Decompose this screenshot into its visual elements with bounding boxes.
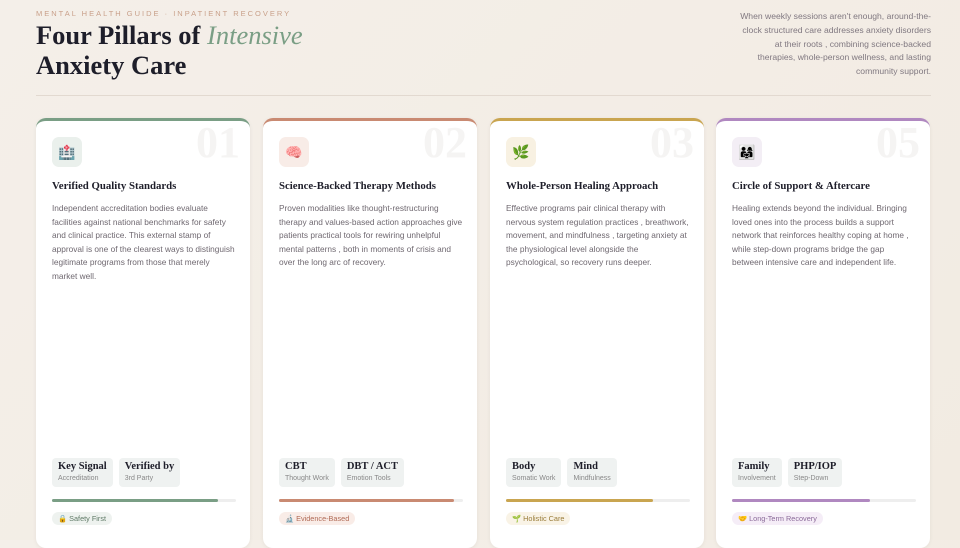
body text: between intensive care and independent life. [732,257,896,267]
panel: whole-person healing [490,118,704,548]
stats: Accreditation [58,475,98,482]
body text: patients practical tools for rewiring unhelpful [279,230,440,240]
body text: while step-down programs bridge the gap [732,244,884,254]
panel: quality standards: 01 [196,118,240,167]
body text: over the long arc of recovery. [279,257,386,267]
stats: Family [738,461,770,472]
body text: legitimate programs from those that merely [52,257,210,267]
body text: Effective programs pair clinical therapy with [506,203,665,213]
body text: psychological, so recovery runs deeper. [506,257,652,267]
stats: 3rd Party [125,475,153,482]
stats [732,458,842,487]
badge [506,512,570,525]
stats: Key Signal [58,461,107,472]
panel: therapy methods: 02 [423,118,467,167]
body text: approval is one of the clearest ways to distinguish [52,244,235,254]
body text: movement, and mindfulness , targeting anxiety at [506,230,687,240]
badge [279,512,355,525]
heading: Verified Quality Standards [52,180,176,192]
body text: and clinical practice. This external stamp of [52,230,210,240]
icon: hospital [52,137,82,167]
body text [506,203,689,267]
panel: therapy methods [263,118,477,548]
kicker: MENTAL HEALTH GUIDE · INPATIENT RECOVERY [36,9,291,18]
body text [52,203,235,281]
icon: family: 👨‍👩‍👧 [738,144,756,160]
body text: market well. [52,271,96,281]
stats: Verified by [125,461,174,472]
icon: brain [279,137,309,167]
body text [732,203,909,267]
intro text: clock structured care addresses anxiety disorders [742,25,931,35]
body text [279,203,462,267]
body text: the physiological level alongside the [506,244,638,254]
body text: Healing extends beyond the individual. Bringing [732,203,907,213]
body text: mental patterns , both in moments of crisis and [279,244,451,254]
stats [506,458,617,487]
panel: support & aftercare [716,118,930,548]
stats: Involvement [738,475,776,482]
badge [732,512,823,525]
panel: quality standards [36,118,250,548]
progress bar [506,499,690,502]
stats [52,458,180,487]
stats [279,458,404,487]
stats: Somatic Work [512,475,555,482]
body text: Proven modalities like thought-restructuring [279,203,439,213]
intro text: community support. [856,66,931,76]
panel: whole-person healing: 03 [650,118,694,167]
body text: nervous system regulation practices , breathwork, [506,217,689,227]
body text: therapy and values-based action approaches give [279,217,462,227]
stats: Thought Work [285,475,329,482]
stats: Emotion Tools [347,475,391,482]
heading: Whole-Person Healing Approach [506,180,658,192]
heading: Circle of Support & Aftercare [732,180,870,192]
stats: Step-Down [794,475,828,482]
intro text: at their roots , combining science-backed [775,39,931,49]
progress bar [52,499,236,502]
badge [52,512,112,525]
badge: 🔬 Evidence-Based [285,514,349,523]
intro text: therapies, whole-person wellness, and lasting [758,52,931,62]
body text: facilities against national benchmarks for safety [52,217,226,227]
intro text: When weekly sessions aren't enough, around-the- [740,11,931,21]
panel: support & aftercare: 05 [876,118,920,167]
body text: network that reinforces healthy coping at home , [732,230,909,240]
title: Four Pillars of Intensive [36,20,303,50]
badge: 🔒 Safety First [58,514,106,523]
badge: 🌱 Holistic Care [512,514,564,523]
progress bar [279,499,463,502]
icon: herb: 🌿 [512,144,530,160]
stats: Body [512,461,535,472]
body text: loved ones into the process builds a support [732,217,894,227]
title: Anxiety Care [36,50,186,80]
title [36,20,303,80]
stats: CBT [285,461,307,472]
icon: family [732,137,762,167]
icon: brain: 🧠 [285,144,303,160]
icon: herb [506,137,536,167]
progress bar [732,499,916,502]
heading: Science-Backed Therapy Methods [279,180,436,192]
stats: DBT / ACT [347,461,398,472]
stats: Mindfulness [573,475,611,482]
body text: Independent accreditation bodies evaluate [52,203,208,213]
icon: hospital: 🏥 [58,144,76,160]
badge: 🤝 Long-Term Recovery [738,514,817,523]
stats: PHP/IOP [794,461,836,472]
intro text [740,11,931,76]
stats: Mind [573,461,598,472]
